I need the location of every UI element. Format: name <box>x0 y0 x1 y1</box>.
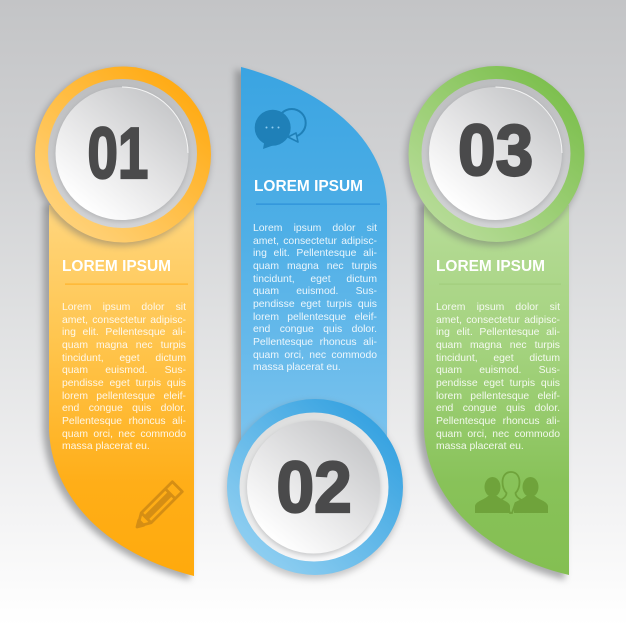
body text: quam euismod. Sus- <box>436 365 560 376</box>
body text: Pellentesque rhoncus ali- <box>436 416 560 427</box>
body text: end congue quis dolor. <box>253 324 377 335</box>
number badge 03: 03 <box>458 110 533 190</box>
heading rule <box>439 284 561 285</box>
green panel shape <box>418 205 569 580</box>
body text: quam orci, nec commodo <box>253 350 377 361</box>
body text: lorem pellentesque eleif- <box>436 391 560 402</box>
body text <box>62 302 186 452</box>
body text: ing elit. Pellentesque ali- <box>253 248 377 259</box>
body text: lorem pellentesque eleif- <box>253 312 377 323</box>
number badge 02 <box>225 399 403 579</box>
body text: Lorem ipsum dolor sit <box>436 302 560 313</box>
body text: quam orci, nec commodo <box>62 429 186 440</box>
column 2: blue panel <box>222 67 406 582</box>
body text <box>253 223 377 373</box>
heading: LOREM IPSUM <box>62 258 171 275</box>
icon: speech bubbles <box>255 109 306 149</box>
number badge 03 <box>406 66 584 246</box>
number badge 01: 01 <box>88 113 148 194</box>
body text: lorem pellentesque eleif- <box>62 391 186 402</box>
body text: amet, consectetur adipisc- <box>253 236 377 247</box>
heading rule <box>256 204 380 205</box>
column 3: green panel <box>402 65 586 582</box>
heading: LOREM IPSUM <box>436 258 545 275</box>
body text: tincidunt, eget dictum <box>253 274 377 285</box>
heading rule <box>65 284 188 285</box>
body text: Lorem ipsum dolor sit <box>62 302 186 313</box>
body text <box>436 302 560 452</box>
body text: quam euismod. Sus- <box>62 365 186 376</box>
blue panel shape <box>235 67 387 490</box>
body text: quam magna nec turpis <box>253 261 377 272</box>
column 1: orange panel <box>29 65 213 582</box>
body text: massa placerat eu. <box>253 362 341 373</box>
number badge 02: 02 <box>276 447 352 527</box>
body text: end congue quis dolor. <box>436 403 560 414</box>
body text: quam euismod. Sus- <box>253 286 377 297</box>
body text: massa placerat eu. <box>62 441 150 452</box>
body text: amet, consectetur adipisc- <box>62 315 186 326</box>
number badge 01 <box>32 66 211 246</box>
body text: end congue quis dolor. <box>62 403 186 414</box>
body text: quam orci, nec commodo <box>436 429 560 440</box>
body text: massa placerat eu. <box>436 441 524 452</box>
body text: Pellentesque rhoncus ali- <box>62 416 186 427</box>
heading: LOREM IPSUM <box>254 178 363 195</box>
icon: people <box>475 472 548 513</box>
icon: pencil <box>132 482 182 532</box>
body text: pendisse eget turpis quis <box>62 378 186 389</box>
body text: ing elit. Pellentesque ali- <box>62 327 186 338</box>
body text: tincidunt, eget dictum <box>436 353 560 364</box>
body text: ing elit. Pellentesque ali- <box>436 327 560 338</box>
body text: Pellentesque rhoncus ali- <box>253 337 377 348</box>
body text: quam magna nec turpis <box>436 340 560 351</box>
body text: tincidunt, eget dictum <box>62 353 186 364</box>
body text: pendisse eget turpis quis <box>253 299 377 310</box>
orange panel shape <box>43 205 194 580</box>
body text: quam magna nec turpis <box>62 340 186 351</box>
body text: pendisse eget turpis quis <box>436 378 560 389</box>
body text: Lorem ipsum dolor sit <box>253 223 377 234</box>
body text: amet, consectetur adipisc- <box>436 315 560 326</box>
